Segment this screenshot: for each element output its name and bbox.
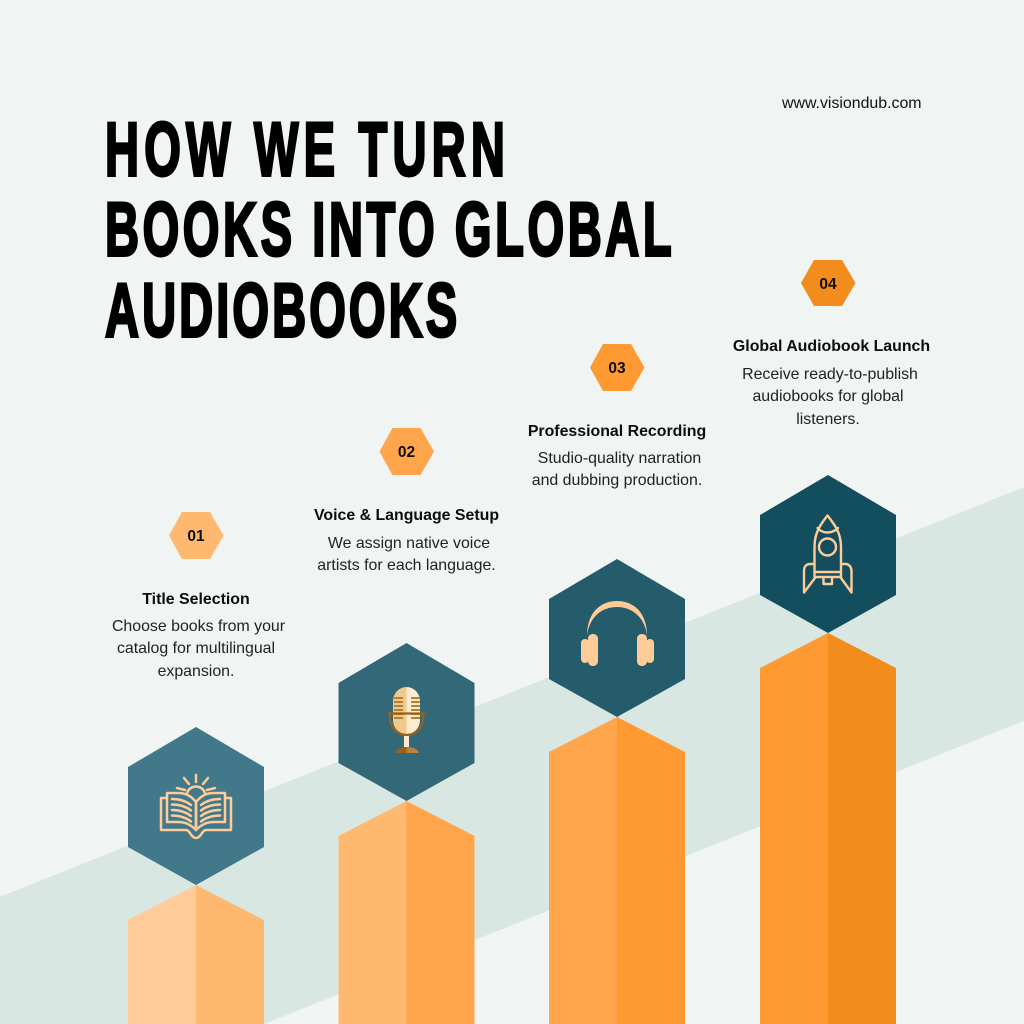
panel: step 1 text xyxy=(112,512,286,680)
description: global audiobook launch: Receive ready-to-publish xyxy=(742,366,918,383)
website url: www.visiondub.com xyxy=(781,95,922,112)
heading: global audiobook launch: Global Audiobook Launch xyxy=(733,338,930,355)
panel: step 4 text xyxy=(733,260,930,428)
badge 02 xyxy=(380,428,434,475)
description: global audiobook launch: listeners. xyxy=(796,411,860,428)
description: voice and language setup xyxy=(317,535,496,574)
title: BOOKS INTO GLOBAL xyxy=(105,188,672,272)
badge 01: 01 xyxy=(187,528,205,545)
description: title selection: Choose books from your xyxy=(112,618,286,635)
panel: step 2 pillar xyxy=(338,801,474,1024)
icon: microphone on hexagon xyxy=(338,643,474,801)
heading: title selection: Title Selection xyxy=(142,591,250,608)
icon: open book with sun on hexagon xyxy=(128,727,264,885)
panel: step 3 text xyxy=(528,344,706,489)
description: professional recording: and dubbing production. xyxy=(532,472,702,489)
badge 01 xyxy=(169,512,224,559)
description: title selection: expansion. xyxy=(158,663,234,680)
description: global audiobook launch: audiobooks for global xyxy=(752,388,904,405)
heading: professional recording: Professional Recording xyxy=(528,423,706,440)
description: title selection xyxy=(112,618,286,680)
badge 02: 02 xyxy=(398,444,415,461)
badge 03: 03 xyxy=(608,360,626,377)
panel: step 4 pillar xyxy=(760,633,896,1024)
badge 04 xyxy=(801,260,856,306)
description: voice and language setup: artists for each language. xyxy=(317,557,496,574)
description: voice and language setup: We assign native voice xyxy=(328,535,490,552)
description: global audiobook launch xyxy=(742,366,918,428)
description: title selection: catalog for multilingual xyxy=(117,640,275,657)
title: HOW WE TURN xyxy=(105,108,505,192)
panel: step 2 text xyxy=(314,428,499,574)
panel: step 1 pillar xyxy=(128,885,264,1024)
badge 03 xyxy=(590,344,644,391)
heading: voice and language setup: Voice & Language Setup xyxy=(314,507,499,524)
badge 04: 04 xyxy=(819,276,837,293)
icon: rocket on hexagon xyxy=(760,475,896,633)
icon: headphones on hexagon xyxy=(549,559,685,717)
description: professional recording xyxy=(532,450,702,489)
title xyxy=(105,108,672,353)
title: AUDIOBOOKS xyxy=(105,269,457,353)
panel: step 3 pillar xyxy=(549,717,685,1024)
diagonal background band xyxy=(0,487,1024,1024)
description: professional recording: Studio-quality narration xyxy=(538,450,701,467)
